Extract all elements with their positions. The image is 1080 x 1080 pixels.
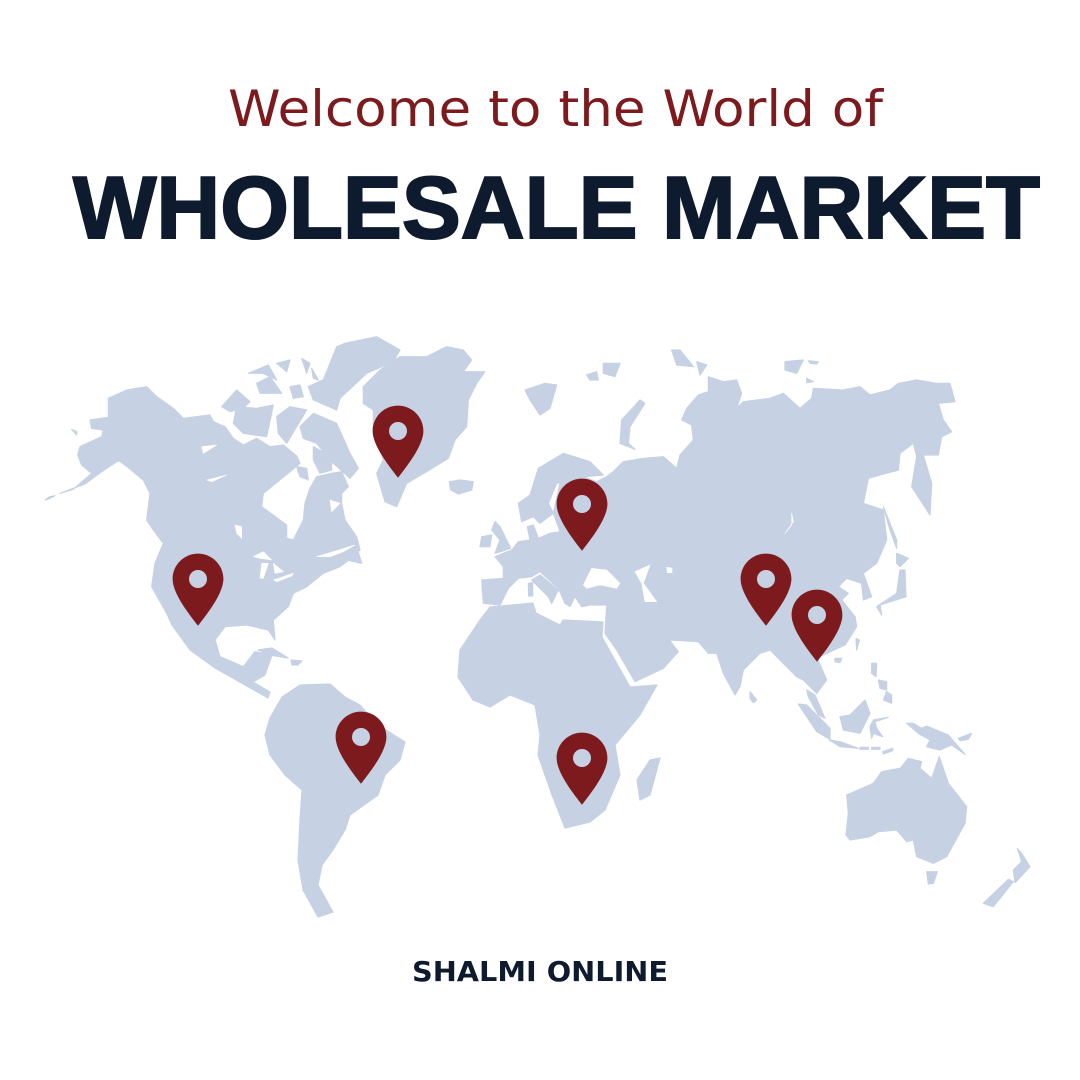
- title: welcome line: Welcome to the World of: [228, 80, 884, 138]
- pin: europe: [557, 479, 607, 551]
- title: wholesale market: WHOLESALE MARKET: [73, 158, 1040, 257]
- map: north america and arctic: [45, 337, 485, 698]
- pin: africa: [557, 733, 607, 805]
- footer brand name: SHALMI ONLINE: [412, 955, 668, 988]
- map: inland seas: [583, 513, 793, 602]
- pin: central asia: [741, 554, 791, 626]
- map: southeast asia and oceania: [750, 658, 1030, 907]
- map pins: [173, 406, 842, 805]
- map: eurasia: [480, 350, 955, 695]
- world map: [45, 337, 1030, 917]
- pin: china: [792, 590, 842, 662]
- map: south america: [265, 684, 405, 917]
- pin: north america: [173, 554, 223, 626]
- pin: greenland: [373, 406, 423, 478]
- map: caribbean islands: [258, 648, 288, 658]
- map: greenland: [363, 347, 485, 507]
- map: africa: [458, 603, 657, 828]
- pin: south america: [336, 712, 386, 784]
- map: north american lakes: [202, 445, 355, 582]
